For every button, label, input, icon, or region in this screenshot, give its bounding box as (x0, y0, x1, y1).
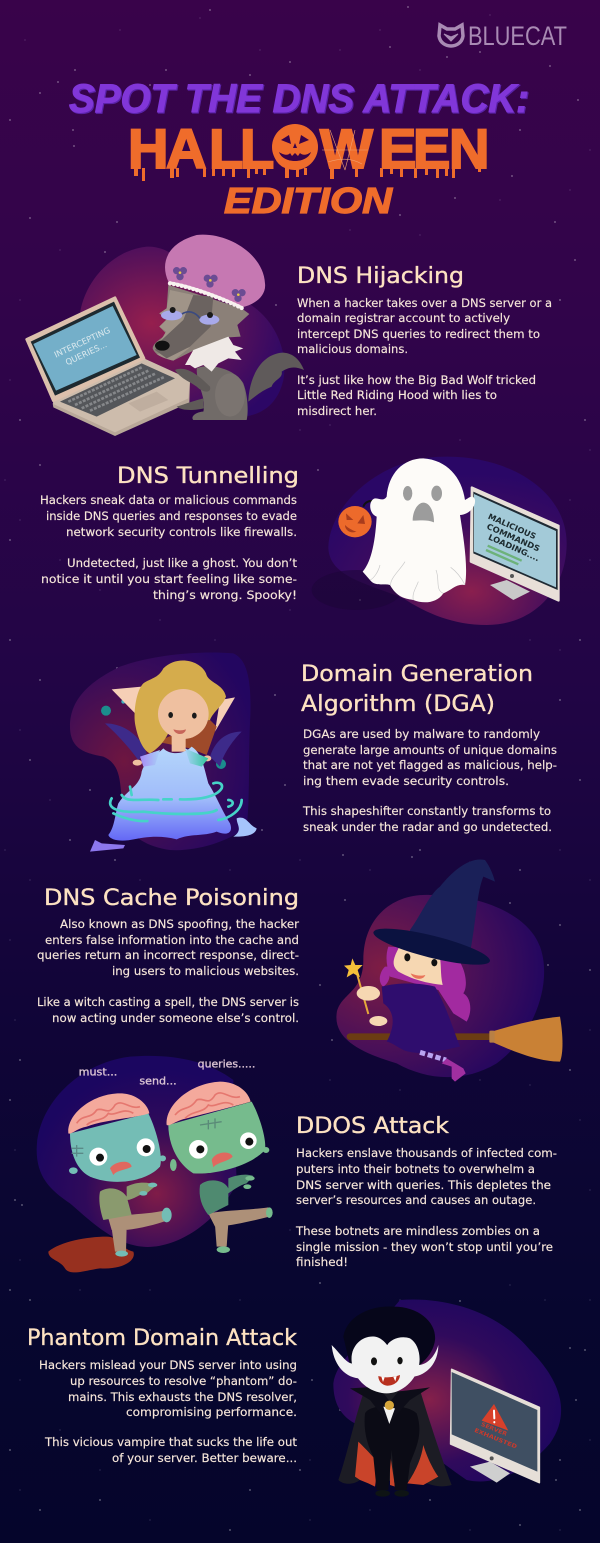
heading: DNS Cache Poisoning (44, 886, 299, 911)
body text: puters into their botnets to overwhelm a (296, 1163, 535, 1176)
body text: thing’s wrong. Spooky! (153, 589, 297, 602)
body text: Like a witch casting a spell, the DNS server is (37, 996, 299, 1009)
broom (347, 1017, 562, 1062)
spider web on W (322, 130, 368, 170)
wings (105, 723, 242, 767)
monitor text: COMMANDS (485, 522, 541, 554)
arms (133, 755, 211, 766)
body text: This shapeshifter constantly transforms to (302, 805, 551, 818)
panel: dga text (301, 662, 557, 834)
speech words: must... (79, 1067, 117, 1079)
wolf ruff (185, 337, 243, 372)
body text: finished! (296, 1256, 348, 1269)
background blob (37, 1056, 237, 1247)
ears (112, 687, 235, 732)
zombie two (167, 1082, 273, 1253)
exclamation (491, 1411, 497, 1422)
wand (344, 958, 368, 1014)
wolf head (153, 285, 249, 361)
pumpkin (338, 501, 375, 537)
body text: inside DNS queries and responses to evade (46, 510, 297, 523)
vampire collar (350, 1387, 430, 1424)
body text: domain registrar account to actively (297, 312, 510, 325)
body text: single mission - they won’t stop until you’re (296, 1241, 553, 1254)
witch hair (380, 947, 470, 1022)
title line: spot the dns attack: SPOT THE DNS ATTACK: (69, 77, 529, 121)
body text: server’s resources and causes an outage. (296, 1194, 536, 1207)
panel: zombies illustration (37, 1056, 273, 1272)
swirl rings (110, 783, 242, 821)
ghost (363, 458, 475, 602)
wolf shower cap (165, 235, 265, 308)
body text (37, 918, 299, 1025)
ghost shadow (312, 570, 402, 610)
vampire hair (343, 1307, 435, 1365)
body text: mains. This exhausts the DNS resolver, (68, 1391, 297, 1404)
body text (40, 494, 298, 602)
panel: phantom domain text (27, 1326, 298, 1465)
heading: Domain Generation (301, 662, 533, 687)
heading: Algorithm (DGA) (301, 692, 495, 717)
heading (301, 662, 533, 717)
body text: DGAs are used by malware to randomly (303, 728, 540, 741)
background blob (328, 457, 567, 625)
slime drips (233, 818, 257, 837)
title line: spot the dns attack: SPOT THE DNS ATTACK: (70, 78, 530, 122)
body text: DNS server with queries. This depletes the (296, 1179, 551, 1192)
panel: vampire illustration (332, 1300, 561, 1497)
body text: sneak under the radar and go undetected. (303, 821, 552, 834)
body text: intercept DNS queries to redirect them to (297, 328, 540, 341)
background blob (80, 247, 284, 417)
drips (134, 168, 481, 181)
warning text: SERVER (480, 1422, 508, 1438)
wolf arm (175, 369, 210, 410)
monitor (471, 487, 559, 601)
body text: enters false information into the cache and (45, 934, 299, 947)
background blob (333, 1300, 561, 1481)
heading: DNS Tunnelling (117, 464, 299, 489)
teal orbs (101, 700, 226, 769)
speech words: queries..... (198, 1058, 255, 1070)
witch face (394, 942, 443, 985)
body text (302, 728, 557, 834)
speech words (79, 1058, 255, 1087)
dress (108, 747, 231, 841)
body text (297, 297, 552, 418)
sleeves (140, 750, 160, 767)
body text: Also known as DNS spoofing, the hacker (60, 918, 299, 931)
warning triangle (482, 1404, 508, 1431)
laptop screen text: INTERCEPTING (52, 325, 112, 360)
monitor text (485, 512, 541, 563)
body text: network security controls like firewalls. (66, 526, 297, 539)
heading: DNS Hijacking (297, 264, 464, 289)
title line: halloween: HALLOWEEN (128, 117, 489, 180)
body text (39, 1359, 298, 1465)
witch hat (371, 859, 495, 972)
title (69, 77, 530, 221)
speech words: send... (139, 1075, 177, 1087)
background blob (336, 895, 544, 1077)
wolf tail (248, 353, 304, 402)
heading: Phantom Domain Attack (27, 1326, 297, 1351)
wolf body (192, 366, 248, 420)
body text: up resources to resolve “phantom” do- (70, 1375, 297, 1388)
body text: It’s just like how the Big Bad Wolf tricked (297, 374, 536, 387)
panel: cache poisoning text (37, 886, 299, 1025)
panel: dga illustration (70, 652, 257, 852)
body text: generate large amounts of unique domains (303, 744, 557, 757)
witch body (382, 984, 460, 1053)
panel: ddos text (295, 1114, 557, 1269)
body text: malicious domains. (297, 343, 408, 356)
pumpkin O (272, 124, 318, 170)
vampire head (332, 1336, 438, 1393)
laptop screen text: QUERIES... (64, 339, 108, 367)
body text: of your server. Better beware... (112, 1452, 297, 1465)
body text (295, 1147, 557, 1269)
witch legs and boot (420, 1052, 466, 1082)
witch hands (357, 986, 387, 1026)
vampire body (365, 1406, 419, 1490)
body text: Undetected, just like a ghost. You don’t (67, 557, 298, 570)
body text: notice it until you start feeling like some- (41, 573, 297, 586)
panel: dns tunnelling text (40, 464, 299, 602)
body text: compromising performance. (126, 1406, 297, 1419)
body text: Hackers sneak data or malicious commands (40, 494, 297, 507)
body text: queries return an incorrect response, direct- (37, 949, 299, 962)
zombie one (68, 1093, 172, 1257)
background blob (70, 652, 251, 850)
monitor (451, 1369, 539, 1483)
icon: bluecat shield (439, 25, 463, 46)
panel: dns hijacking illustration (27, 235, 304, 436)
back hair (157, 720, 217, 755)
body text: misdirect her. (297, 405, 377, 418)
panel: witch illustration (336, 859, 562, 1082)
monitor text: MALICIOUS (487, 512, 538, 541)
heading: DDOS Attack (296, 1114, 449, 1139)
panel: logo (439, 21, 567, 51)
warning text: EXHAUSTED (473, 1428, 518, 1451)
cape lining (355, 1442, 438, 1487)
panel: dns tunnelling illustration (312, 457, 567, 625)
body text: that are not yet flagged as malicious, help- (303, 759, 557, 772)
body text: This vicious vampire that sucks the life out (44, 1436, 298, 1449)
vampire cape (338, 1390, 452, 1486)
title line: edition: EDITION (224, 180, 393, 221)
laptop (27, 298, 190, 436)
monitor text: LOADING.... (487, 533, 541, 563)
vampire shoes (375, 1490, 409, 1497)
logo wordmark: BLUECAT (468, 21, 567, 51)
body text: Hackers enslave thousands of infected com- (296, 1147, 557, 1160)
hair (135, 660, 226, 753)
body text: ing users to malicious websites. (112, 965, 299, 978)
blood puddle (48, 1237, 134, 1272)
body text: Hackers mislead your DNS server into using (39, 1359, 297, 1372)
body text: When a hacker takes over a DNS server or a (297, 297, 552, 310)
body text: Little Red Riding Hood with lies to (297, 389, 497, 402)
panel: dns hijacking text (297, 264, 552, 418)
body text: ing them evade security controls. (303, 775, 509, 788)
face and neck (158, 689, 209, 752)
warning text (473, 1422, 518, 1451)
body text: now acting under someone else’s control. (52, 1012, 299, 1025)
body text: These botnets are mindless zombies on a (295, 1225, 540, 1238)
